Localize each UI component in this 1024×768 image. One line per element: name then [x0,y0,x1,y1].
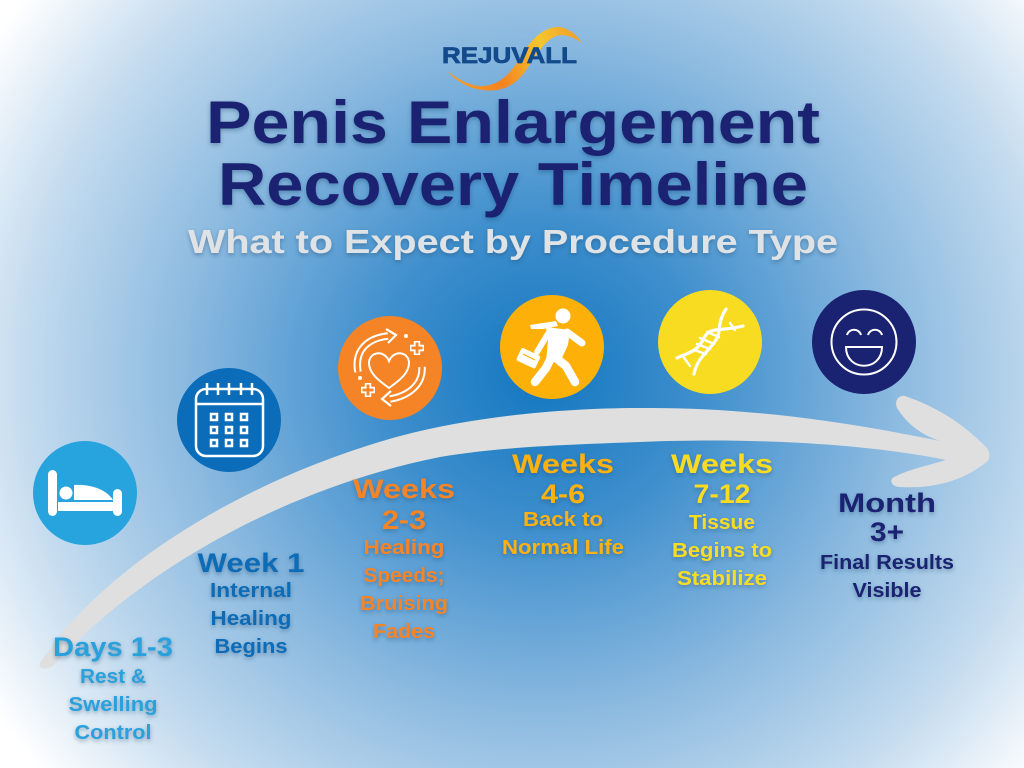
label: days 1-3: Swelling [68,694,158,716]
label: weeks 4-6: 4-6 [541,479,585,509]
label: week 1: Internal [210,580,292,602]
label: weeks 2-3: Fades [373,621,435,643]
label: month 3+ [820,488,954,602]
label: month 3+: Month [838,488,936,518]
subtitle: What to Expect by Procedure Type [188,223,838,260]
icon: bed [33,441,137,545]
label: weeks 7-12: Tissue [689,512,755,534]
label: month 3+: 3+ [870,517,904,547]
label: weeks 4-6 [502,449,624,559]
label: days 1-3 [53,632,173,744]
icon: DNA [658,290,762,394]
icon: smiley [812,290,916,394]
label: days 1-3: Rest & [80,666,146,688]
label: weeks 2-3: Weeks [353,474,455,504]
label: weeks 4-6: Weeks [512,449,614,479]
icon: walking businessman [500,295,604,399]
label: weeks 7-12: Begins to [672,540,772,562]
label: weeks 2-3: Speeds; [364,565,444,587]
label: weeks 2-3 [353,474,455,643]
label: weeks 7-12: Stabilize [677,568,767,590]
icon: calendar [177,368,281,472]
arrow [40,396,990,669]
label: weeks 2-3: Bruising [360,593,448,615]
label: week 1: Week 1 [198,548,304,578]
label: weeks 2-3: 2-3 [382,505,426,535]
label: weeks 7-12: 7-12 [694,479,750,509]
label: month 3+: Visible [852,580,922,602]
label: week 1 [198,548,304,658]
label: days 1-3: Days 1-3 [53,632,173,662]
label: weeks 7-12 [671,449,773,590]
label: week 1: Begins [214,636,288,658]
label: weeks 2-3: Healing [364,537,444,559]
title: Penis Enlargement [206,89,820,156]
label: days 1-3: Control [74,722,152,744]
label: weeks 4-6: Back to [523,509,603,531]
logo: REJUVALL [442,43,577,68]
label: weeks 4-6: Normal Life [502,537,624,559]
icon: heart with arrows [338,316,442,420]
label: month 3+: Final Results [820,552,954,574]
title: Recovery Timeline [218,151,808,218]
label: week 1: Healing [210,608,292,630]
logo [442,27,582,91]
label: weeks 7-12: Weeks [671,449,773,479]
title [206,89,820,218]
